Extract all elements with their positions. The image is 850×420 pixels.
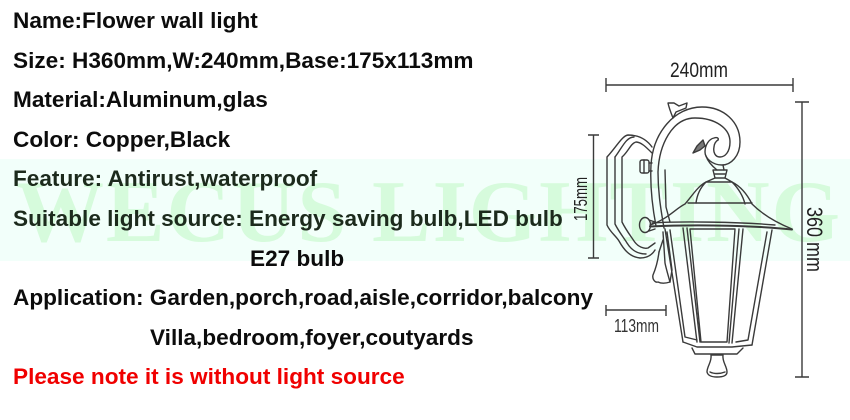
- spec line: size: Size: H360mm,W:240mm,Base:175x113mm: [13, 48, 474, 73]
- watermark band: WECUS LIGHTING: WECUS LIGHTING: [16, 164, 840, 261]
- lantern roof: [650, 170, 792, 230]
- spec line: name: Name:Flower wall light: [13, 8, 258, 33]
- spec line: feature: Feature: Antirust,waterproof: [13, 166, 317, 191]
- dimension: 360mm height: [795, 102, 827, 377]
- dimension: 240mm width: [606, 59, 793, 92]
- spec line: material: Material:Aluminum,glas: [13, 87, 268, 112]
- dimension: 113mm base width: [606, 305, 666, 336]
- dimension: 240mm width: 240mm: [670, 59, 728, 82]
- dimension: 175mm base height: 175mm: [571, 177, 591, 221]
- dimension: 360mm height: 360 mm: [802, 207, 827, 272]
- lantern bottom finial: [707, 355, 727, 377]
- lantern glass body: [665, 228, 772, 354]
- mounting bolts: [640, 160, 655, 232]
- spec line: color: Color: Copper,Black: [13, 127, 230, 152]
- spec line: application: Application: Garden,porch,road,aisle,corridor,balcony: [13, 285, 593, 310]
- spec line: bulb type: E27 bulb: [250, 246, 344, 271]
- dimension: 175mm base height: [571, 135, 599, 258]
- dimension: 113mm base width: 113mm: [614, 316, 659, 336]
- icon: wall lamp line drawing: [607, 103, 792, 377]
- note: without light source: Please note it is without light source: [13, 364, 405, 389]
- wall bracket: [607, 135, 655, 258]
- spec line: light source: Suitable light source: Energy saving bulb,LED bulb: [13, 206, 563, 231]
- spec line: application continued: Villa,bedroom,foyer,coutyards: [150, 325, 474, 350]
- scroll arm: [651, 103, 740, 283]
